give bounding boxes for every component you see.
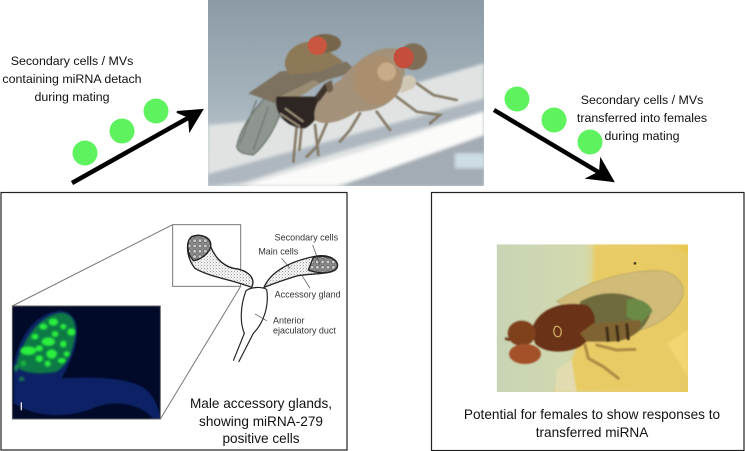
panel: female response: [432, 192, 744, 450]
text: transferred label: transferred into females: [577, 111, 707, 125]
fly: male wings: [237, 62, 357, 155]
diagram labels: Main cells: [258, 246, 299, 256]
text: female response caption: [464, 407, 720, 440]
green dots: transferred cells: [504, 86, 602, 154]
text: male accessory glands caption: positive cells: [222, 431, 300, 446]
photo: female fly: [497, 244, 688, 392]
text: detach label: during mating: [34, 90, 110, 104]
diagram: accessory gland: [188, 235, 338, 362]
male thorax and abdomen: [285, 41, 343, 75]
text: detach label: containing miRNA detach: [2, 72, 142, 86]
text: detach label: Secondary cells / MVs: [11, 54, 133, 68]
zoom box and connector lines: [12, 225, 241, 419]
micrograph: miRNA-279 positive cells: [12, 306, 160, 419]
diagram labels: ejaculatory duct: [273, 325, 336, 335]
arrow: up right: [72, 110, 202, 183]
text: detach label: [2, 54, 142, 104]
diagram labels: [258, 232, 341, 335]
legs: [293, 83, 457, 162]
text: female response caption: Potential for females to show responses to: [464, 407, 720, 422]
text: transferred label: [577, 93, 707, 143]
diagram labels: Secondary cells: [275, 232, 339, 242]
diagram labels: Anterior: [273, 315, 304, 325]
text: male accessory glands caption: Male accessory glands,: [190, 396, 332, 411]
panel: male accessory glands: [1, 192, 347, 450]
text: female response caption: transferred miRNA: [536, 425, 649, 440]
text: male accessory glands caption: [190, 396, 332, 446]
diagram labels: Accessory gland: [275, 289, 341, 299]
fly: red eyes: [308, 36, 414, 68]
photo: mating flies: [208, 0, 484, 186]
green dots: detaching cells: [72, 98, 168, 166]
text: transferred label: Secondary cells / MVs: [581, 93, 703, 107]
arrow: down right: [494, 110, 613, 181]
text: male accessory glands caption: showing miRNA-279: [199, 414, 323, 429]
female body: [314, 48, 405, 123]
text: transferred label: during mating: [604, 129, 680, 143]
